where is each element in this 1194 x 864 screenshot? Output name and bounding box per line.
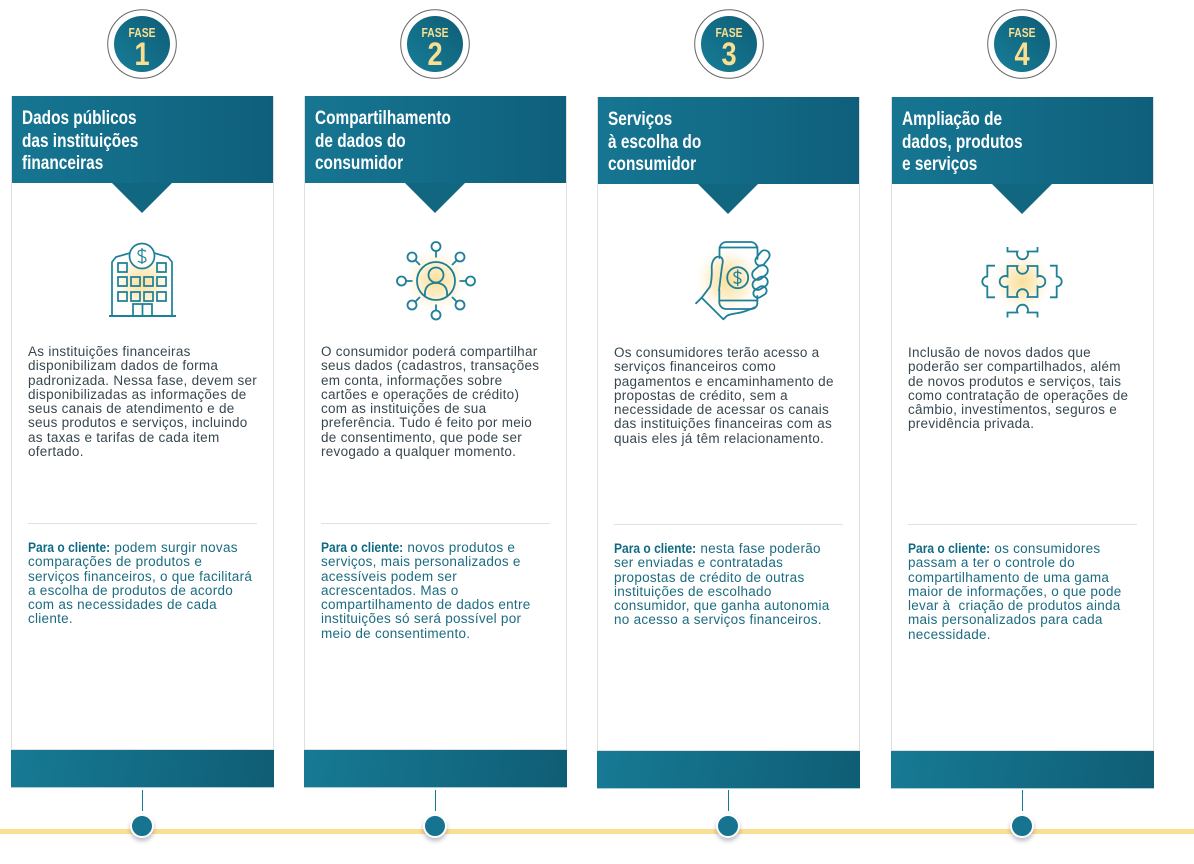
fase 1 badge: 1 [134, 37, 150, 73]
text: fase 3 description: propostas de crédito, sem a [614, 388, 788, 403]
heading: fase 3: à escolha do [608, 132, 701, 152]
heading: fase 4: Ampliação de [902, 109, 1002, 130]
fase 3 badge: 3 [721, 37, 737, 73]
text: fase 3 description [614, 345, 834, 446]
text: fase 3 para o cliente: propostas de crédito de outras [614, 570, 804, 584]
text: fase 3 para o cliente: Para o cliente: [614, 541, 696, 556]
text: fase 3 description: Os consumidores terão acesso a [614, 345, 819, 360]
heading: fase 2 [305, 96, 566, 183]
text: fase 1 description: padronizada. Nessa fase, devem ser [28, 372, 257, 388]
text: fase 4 para o cliente: Para o cliente: [908, 541, 990, 556]
text: fase 4 para o cliente: os consumidores [994, 541, 1100, 556]
heading: fase 2: Compartilhamento [315, 108, 451, 129]
text: fase 2 description: seus dados (cadastros, transações [321, 358, 539, 373]
text: fase 4 description: como contratação de operações de [908, 388, 1128, 403]
text: fase 1 para o cliente: podem surgir novas [114, 540, 238, 555]
text: fase 1 description: seus produtos e serviços, incluindo [28, 415, 248, 430]
icon: bank building [109, 242, 176, 317]
text: fase 1 para o cliente: serviços financeiros, o que facilitará [28, 568, 252, 584]
text: fase 2 description: preferência. Tudo é feito por meio [321, 415, 532, 430]
text: fase 4 description: câmbio, investimentos, seguros e [908, 402, 1117, 417]
panel: fase 1 [11, 96, 274, 788]
text: fase 3 para o cliente: instituições de escolhado [614, 584, 772, 599]
fase 4 badge: FASE [1008, 25, 1036, 40]
text: fase 3 para o cliente: nesta fase poderão [700, 541, 821, 556]
heading: fase 4: dados, produtos [902, 132, 1023, 152]
icon: puzzle [981, 247, 1063, 318]
fase 2 badge [400, 9, 470, 79]
text: fase 2 description: O consumidor poderá compartilhar [321, 344, 538, 359]
heading: fase 3: Serviços [608, 109, 672, 130]
timeline marker 4 [1010, 814, 1034, 838]
text: fase 3 para o cliente: consumidor, que ganha autonomia [614, 598, 830, 613]
text: fase 1 description: seus canais de atendimento e de [28, 401, 235, 416]
text: fase 2 para o cliente: novos produtos e [407, 540, 515, 555]
heading: fase 3: consumidor [608, 154, 696, 175]
icon: connected person [396, 241, 476, 320]
text: fase 4 para o cliente: necessidade. [908, 626, 991, 642]
text: fase 3 description: pagamentos e encaminhamento de [614, 374, 834, 388]
panel: fase 2 [304, 96, 567, 788]
text: fase 1 description: disponibilizadas as informações de [28, 387, 247, 402]
text: fase 2 para o cliente: acessíveis podem ser [321, 568, 457, 584]
text: fase 4 para o cliente: passam a ter o controle do [908, 555, 1075, 570]
text: fase 2 para o cliente: meio de consentimento. [321, 626, 470, 640]
text: fase 3 para o cliente: no acesso a serviços financeiros. [614, 612, 822, 627]
heading: fase 1: financeiras [22, 153, 103, 174]
text: fase 2 para o cliente: Para o cliente: [321, 540, 403, 555]
text: fase 2 para o cliente: acrescentados. Mas o [321, 583, 458, 598]
text: fase 2 description [321, 344, 539, 459]
text: fase 2 para o cliente [321, 540, 530, 640]
text: fase 4 para o cliente: maior de informações, o que pode [908, 584, 1122, 599]
text: fase 3 description: quais eles já têm relacionamento. [614, 430, 824, 446]
text: fase 1 para o cliente: Para o cliente: [28, 540, 110, 555]
timeline marker 3 [716, 814, 740, 838]
fase 1 badge: FASE [128, 25, 156, 40]
timeline marker 1 [130, 814, 154, 838]
text: fase 4 description [908, 345, 1128, 431]
heading: fase 2: de dados do [315, 130, 406, 152]
text: fase 4 description: previdência privada. [908, 416, 1034, 431]
timeline marker 2 [422, 814, 446, 838]
text: fase 1 description [28, 344, 257, 459]
text: fase 1 para o cliente [28, 540, 252, 626]
heading: fase 4 [892, 97, 1153, 184]
text: fase 4 para o cliente: mais personalizados para cada [908, 612, 1103, 627]
text: fase 1 para o cliente: com as necessidades de cada [28, 597, 217, 612]
fase 1 badge [107, 9, 177, 79]
text: fase 2 para o cliente: compartilhamento de dados entre [321, 597, 530, 612]
text: fase 4 description: de novos produtos e serviços, tais [908, 374, 1121, 388]
text: fase 1 description: as taxas e tarifas de cada item [28, 430, 219, 444]
fase 4 badge [987, 9, 1057, 79]
fase 2 badge: FASE [422, 25, 449, 40]
heading: fase 3 [598, 97, 859, 184]
text: fase 3 para o cliente [614, 541, 830, 627]
text: fase 2 description: de consentimento, que pode ser [321, 430, 522, 444]
text: fase 1 description: As instituições financeiras [28, 344, 191, 359]
icon: phone in hand [695, 241, 771, 320]
text: fase 1 para o cliente: a escolha de produtos de acordo [28, 583, 233, 598]
text: fase 1 para o cliente: cliente. [28, 611, 73, 626]
fase 3 badge [694, 9, 764, 79]
text: fase 2 description: cartões e operações de crédito) [321, 387, 519, 402]
text: fase 2 description: revogado a qualquer momento. [321, 444, 516, 459]
fase 4 badge: 4 [1014, 37, 1030, 73]
text: fase 4 para o cliente [908, 541, 1122, 642]
heading: fase 2: consumidor [315, 153, 403, 174]
text: fase 3 description: serviços financeiros como [614, 359, 776, 374]
heading: fase 1 [12, 96, 273, 183]
text: fase 4 description: poderão ser compartilhados, além [908, 359, 1121, 374]
text: fase 1 para o cliente: comparações de produtos e [28, 554, 202, 569]
text: fase 1 description: ofertado. [28, 444, 84, 459]
text: fase 1 description: disponibilizam dados de forma [28, 358, 218, 373]
text: fase 3 description: necessidade de acessar os canais [614, 402, 829, 417]
heading: fase 4: e serviços [902, 154, 977, 175]
text: fase 3 description: das instituições financeiras com as [614, 416, 832, 431]
text: fase 2 description: com as instituições de sua [321, 401, 486, 416]
panel: fase 3 [597, 97, 860, 789]
text: fase 2 para o cliente: instituições só será possível por [321, 611, 521, 626]
text: fase 4 para o cliente: compartilhamento de uma gama [908, 570, 1109, 584]
fase 2 badge: 2 [427, 37, 443, 73]
text: fase 4 para o cliente: levar à criação de produtos ainda [908, 598, 1121, 613]
text: fase 4 description: Inclusão de novos dados que [908, 345, 1091, 360]
fase 3 badge: FASE [716, 25, 743, 40]
heading: fase 1: das instituições [22, 130, 138, 152]
timeline line [0, 829, 1194, 834]
text: fase 3 para o cliente: ser enviadas e contratadas [614, 555, 783, 570]
panel: fase 4 [891, 97, 1154, 789]
heading: fase 1: Dados públicos [22, 108, 137, 129]
text: fase 2 description: em conta, informações sobre [321, 372, 502, 388]
text: fase 2 para o cliente: serviços, mais personalizados e [321, 554, 521, 569]
